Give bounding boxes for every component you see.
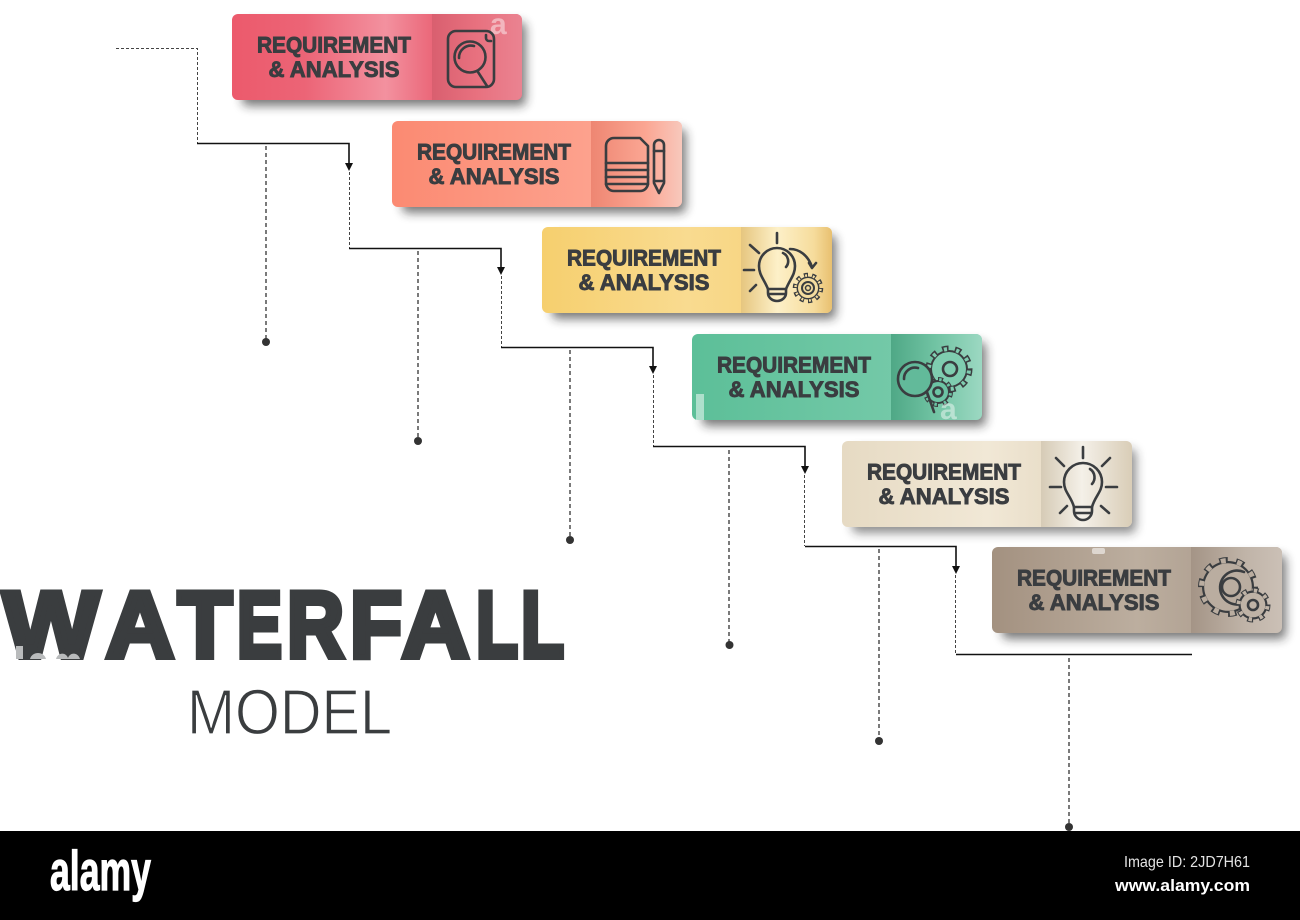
footer bar [0,831,1300,920]
panel: step 1 card: REQUIREMENT [257,32,412,58]
alamy logo: alamy [50,839,151,902]
panel: step 6 card: & ANALYSIS [1028,590,1160,615]
title: A [106,572,174,677]
icon: document with magnifier [448,31,494,87]
drop line 2 [414,251,422,445]
flow connector: staircase lines and arrows [116,48,1192,654]
website: www.alamy.com [1114,876,1250,895]
title: L [521,572,564,677]
panel: step 6 card [992,547,1286,639]
panel: step 4 card: & ANALYSIS [728,377,860,402]
panel: step 3 card: REQUIREMENT [567,246,722,270]
panel: step 5 card: REQUIREMENT [867,460,1022,484]
title: R [287,572,344,677]
panel: step 2 card: REQUIREMENT [417,140,572,164]
icon: notepad and pencil [606,138,664,193]
drop line 3 [566,350,574,544]
title: T [178,572,232,677]
panel: step 2 card: & ANALYSIS [428,164,560,189]
drop line 4 [726,450,734,649]
drop line 1 [262,146,270,346]
image id: Image ID: 2JD7H61 [1124,854,1250,871]
panel: step 2 card [392,121,686,213]
icon: gears [1201,560,1268,620]
panel: step 3 card: & ANALYSIS [578,270,710,295]
subtitle: MODEL [187,676,392,748]
panel: step 4 card: a [940,393,957,426]
panel: step 1 card [232,8,526,106]
panel: step 5 card: & ANALYSIS [878,484,1010,509]
panel: step 4 card: REQUIREMENT [717,352,872,378]
icon: light bulb with gear [744,233,821,301]
title: E [237,572,282,677]
title: F [350,572,402,677]
icon: light bulb [1050,447,1117,520]
title: W [3,572,99,677]
title: L [476,572,518,677]
icon: magnifier and gears [898,348,970,412]
panel: step 3 card [542,227,836,319]
panel: step 1 card: a [490,8,507,41]
drop line 5 [875,549,883,745]
panel: step 1 card: & ANALYSIS [268,57,400,82]
panel: step 5 card [842,441,1136,533]
drop line 6 [1065,658,1073,831]
title: A [402,572,469,677]
title [3,572,564,748]
panel: step 6 card: REQUIREMENT [1017,566,1172,590]
panel: step 4 card [692,334,986,426]
